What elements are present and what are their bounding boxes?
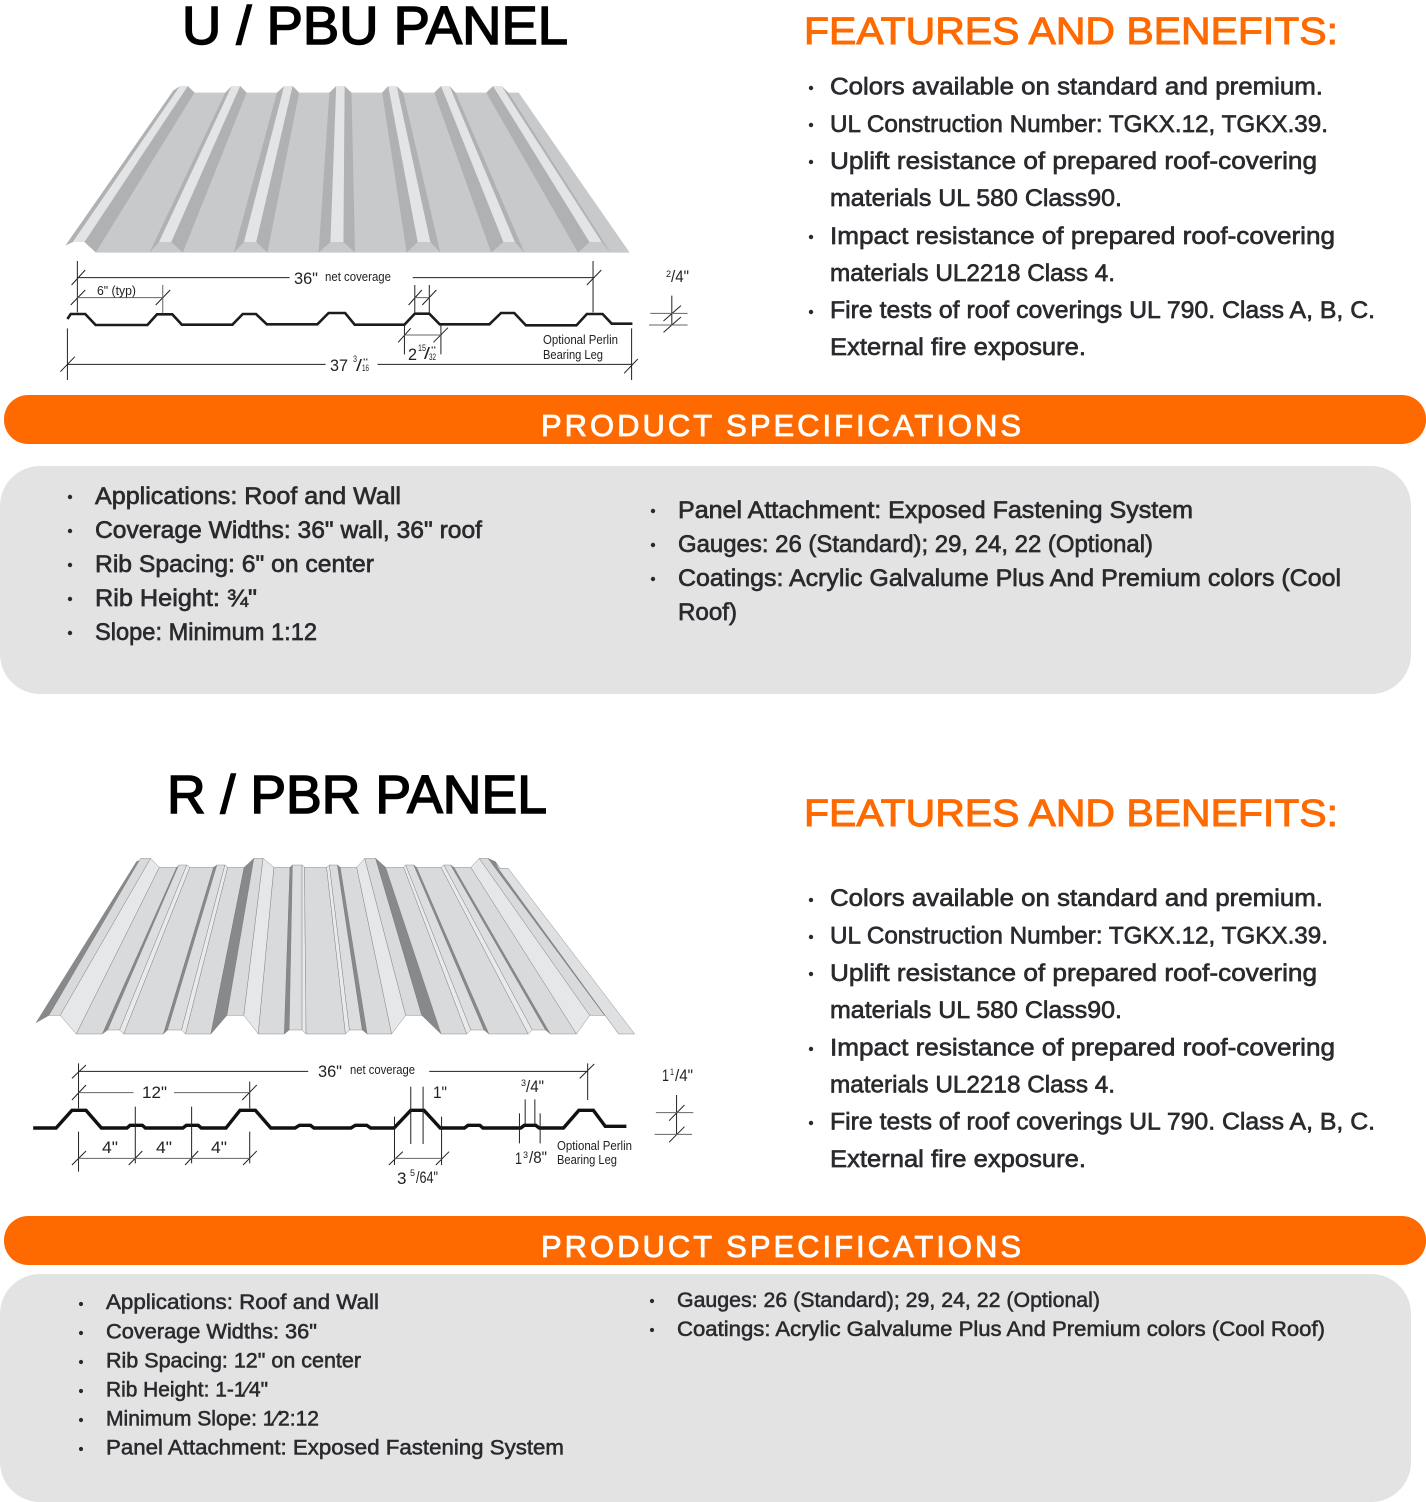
profile diagram: U / PBU dimensions: " [363, 357, 368, 367]
profile diagram: U / PBU dimensions [60, 261, 689, 380]
panel: U panel product specifications: Rib Spacing: 6" on center [95, 551, 374, 578]
profile diagram: R / PBR dimensions: Bearing Leg [557, 1153, 617, 1167]
banner: product specifications (R panel): PRODUCT SPECIFICATIONS [541, 1229, 1021, 1264]
profile diagram: U / PBU dimensions: Bearing Leg [543, 348, 603, 362]
panel: U panel product specifications [0, 466, 1411, 694]
list: U panel features: Colors available on standard and premium. [830, 74, 1323, 100]
panel: R panel product specifications: Applications: Roof and Wall [106, 1290, 379, 1314]
profile diagram: R / PBR dimensions: 4" [211, 1138, 227, 1157]
profile diagram: U / PBU dimensions: 37 [330, 356, 348, 375]
profile diagram: U / PBU dimensions: / [356, 356, 362, 375]
profile diagram: R / PBR dimensions: 36" [318, 1062, 342, 1081]
profile diagram: U / PBU dimensions: " [431, 345, 436, 355]
panel: U panel product specifications: Slope: Minimum 1:12 [95, 619, 317, 646]
panel: R panel product specifications: Gauges: 26 (Standard); 29, 24, 22 (Optional) [677, 1288, 1100, 1312]
list: U panel features: materials UL2218 Class 4. [830, 260, 1115, 287]
panel: U panel product specifications: Gauges: 26 (Standard); 29, 24, 22 (Optional) [678, 531, 1153, 558]
panel: R panel product specifications: Coverage Widths: 36" [106, 1320, 317, 1344]
list: R panel features [809, 885, 1375, 1173]
panel illustration: R / PBR roof panel [36, 858, 635, 1034]
list: R panel features: Impact resistance of prepared roof-covering [830, 1034, 1335, 1062]
profile diagram: R / PBR dimensions: /64" [416, 1168, 438, 1187]
profile diagram: U / PBU dimensions: Optional Perlin [543, 333, 618, 347]
panel: U panel product specifications: Roof) [678, 599, 737, 626]
banner: product specifications (U panel) [4, 395, 1426, 444]
heading: features and benefits (R panel): FEATURES AND BENEFITS: [804, 793, 1338, 835]
profile diagram: R / PBR dimensions: 1 [670, 1067, 674, 1077]
profile diagram: U / PBU dimensions: 32 [429, 352, 436, 362]
panel: R panel product specifications: Minimum Slope: 1⁄2:12 [106, 1406, 319, 1430]
list: U panel features: materials UL 580 Class90. [830, 185, 1122, 212]
profile diagram: R / PBR dimensions: net coverage [350, 1063, 415, 1077]
list: U panel features [809, 74, 1375, 361]
profile diagram: R / PBR dimensions: 1" [433, 1083, 447, 1102]
panel: U panel product specifications: Panel Attachment: Exposed Fastening System [678, 497, 1193, 524]
list: R panel features: materials UL 580 Class90. [830, 997, 1122, 1024]
panel: R panel product specifications: Rib Spacing: 12" on center [106, 1348, 361, 1372]
profile diagram: U / PBU dimensions: 15 [418, 343, 426, 353]
profile diagram: U / PBU dimensions: 3 [353, 354, 357, 364]
list: U panel features: Fire tests of roof coverings UL 790. Class A, B, C. [830, 297, 1375, 324]
banner: product specifications (U panel): PRODUCT SPECIFICATIONS [541, 408, 1021, 443]
profile diagram: R / PBR dimensions: 4" [156, 1138, 172, 1157]
list: U panel features: Uplift resistance of prepared roof-covering [830, 148, 1317, 175]
profile diagram: R / PBR dimensions: 1 [662, 1066, 669, 1085]
list: R panel features: UL Construction Number: TGKX.12, TGKX.39. [830, 922, 1328, 950]
list: R panel features: Colors available on standard and premium. [830, 885, 1323, 912]
profile diagram: R / PBR dimensions: 1 [515, 1149, 522, 1168]
profile diagram: R / PBR dimensions: /4" [526, 1077, 544, 1096]
list: R panel features: Fire tests of roof coverings UL 790. Class A, B, C. [830, 1108, 1375, 1136]
profile diagram: U / PBU dimensions: 2 [408, 345, 417, 364]
heading: features and benefits (U panel): FEATURES AND BENEFITS: [804, 11, 1338, 53]
profile diagram: R / PBR dimensions: 3 [521, 1078, 526, 1088]
profile diagram: R / PBR dimensions: 3 [523, 1150, 528, 1160]
banner: product specifications (R panel) [4, 1216, 1426, 1265]
panel: U panel product specifications: Rib Height: ¾" [95, 585, 257, 612]
panel: U panel product specifications: Coverage Widths: 36" wall, 36" roof [95, 517, 482, 544]
profile diagram: U / PBU dimensions: net coverage [325, 270, 391, 284]
panel: U panel product specifications: Coatings: Acrylic Galvalume Plus And Premium colors (Cool [678, 565, 1341, 592]
profile diagram: R / PBR dimensions: Optional Perlin [557, 1139, 632, 1153]
profile diagram: R / PBR dimensions [33, 1062, 693, 1188]
profile diagram: R / PBR dimensions: /8" [529, 1148, 547, 1167]
profile diagram: U / PBU dimensions: /4" [671, 267, 689, 286]
list: U panel features: Impact resistance of prepared roof-covering [830, 223, 1335, 250]
list: U panel features: External fire exposure. [830, 334, 1086, 361]
profile diagram: R / PBR dimensions: 4" [102, 1138, 118, 1157]
title: R / PBR panel: R / PBR PANEL [167, 765, 547, 825]
profile diagram: U / PBU dimensions: 2 [666, 269, 671, 279]
list: R panel features: materials UL2218 Class 4. [830, 1072, 1115, 1098]
list: R panel features: External fire exposure. [830, 1146, 1086, 1173]
list: R panel features: Uplift resistance of prepared roof-covering [830, 960, 1317, 987]
panel: R panel product specifications [0, 1274, 1411, 1502]
profile diagram: R / PBR dimensions: 3 [397, 1169, 406, 1188]
panel: R panel product specifications: Coatings: Acrylic Galvalume Plus And Premium colors (Cool Roof) [677, 1317, 1325, 1341]
panel: R panel product specifications: Rib Height: 1-1⁄4" [106, 1378, 268, 1402]
profile diagram: R / PBR dimensions: 5 [410, 1168, 415, 1178]
profile diagram: R / PBR dimensions: /4" [675, 1066, 693, 1085]
profile diagram: U / PBU dimensions: 36" [294, 269, 318, 288]
panel: R panel product specifications: Panel Attachment: Exposed Fastening System [106, 1436, 564, 1460]
list: U panel features: UL Construction Number: TGKX.12, TGKX.39. [830, 111, 1328, 138]
profile diagram: U / PBU dimensions: 6" (typ) [97, 284, 136, 298]
profile diagram: U / PBU dimensions: 16 [362, 363, 369, 373]
panel: U panel product specifications: Applications: Roof and Wall [95, 483, 401, 510]
profile diagram: U / PBU dimensions: / [424, 344, 430, 363]
profile diagram: R / PBR dimensions: 12" [142, 1083, 167, 1102]
panel illustration: U / PBU roof panel [65, 86, 630, 253]
